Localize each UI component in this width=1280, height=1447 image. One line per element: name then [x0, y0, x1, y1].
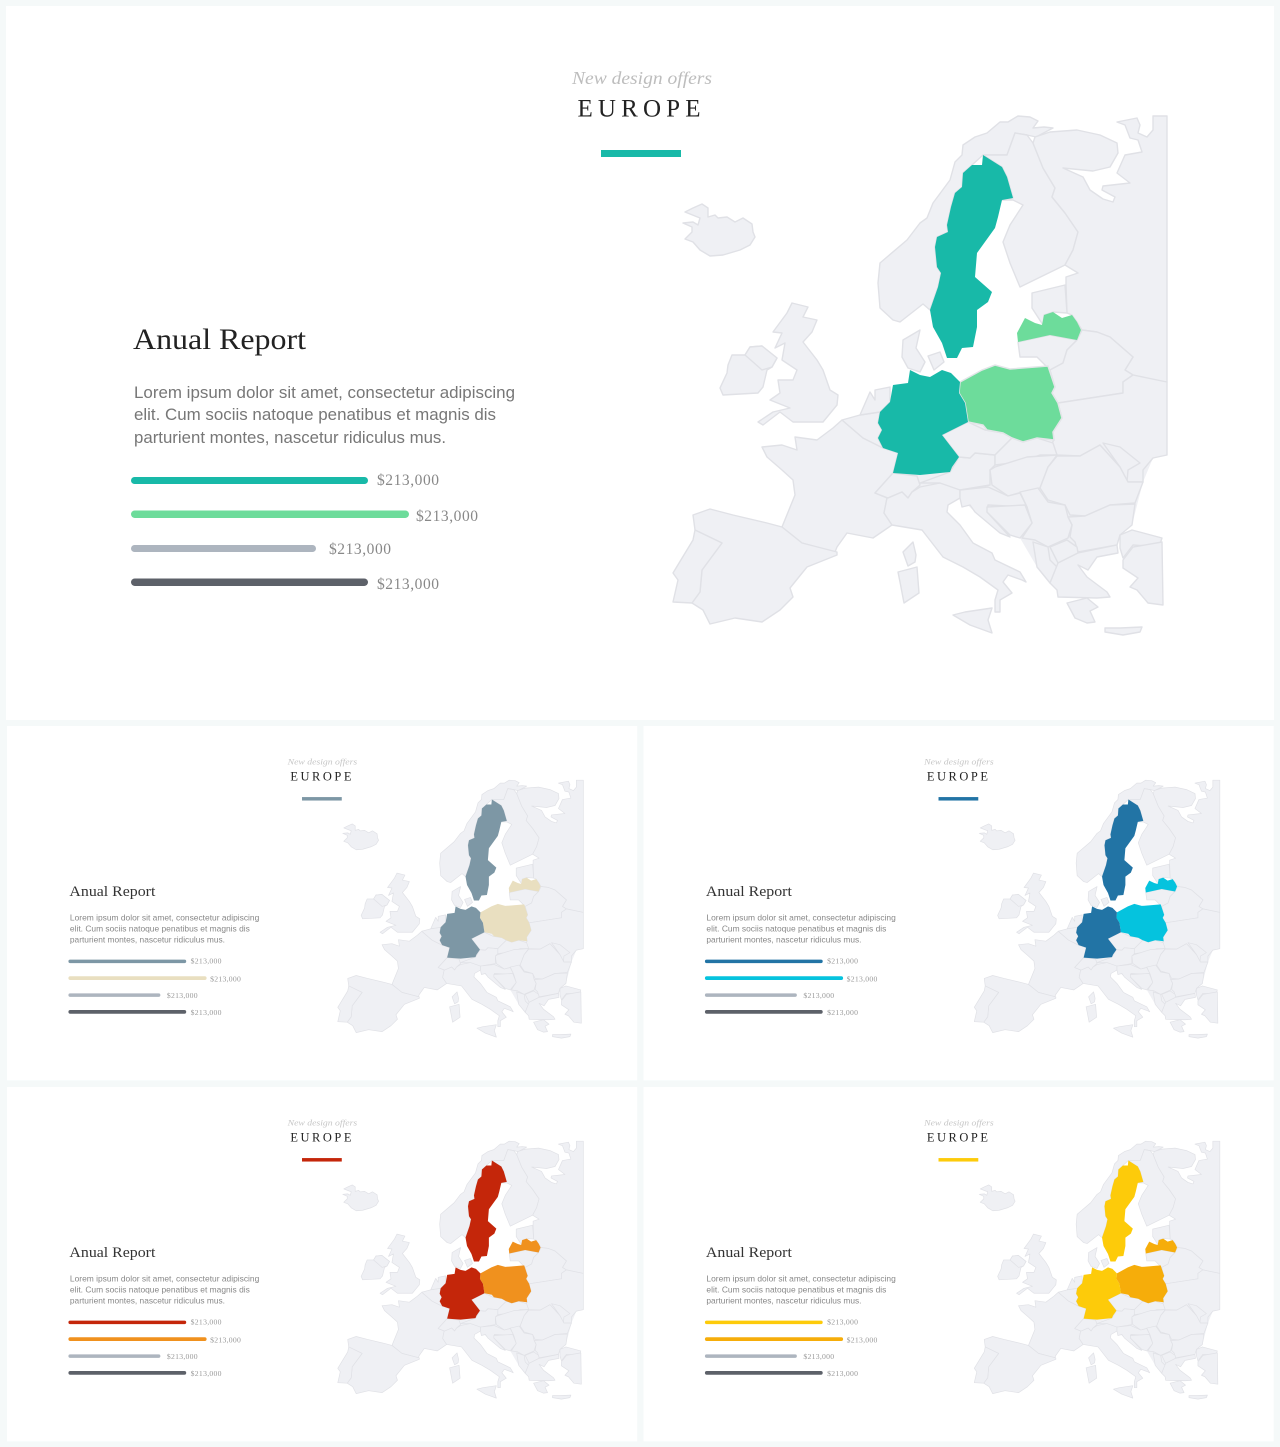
heading: Anual Report [69, 884, 156, 900]
bar chart: $213,000 [377, 472, 439, 489]
bar chart: $213,000 [827, 1369, 858, 1378]
bar chart: $213,000 [191, 1318, 222, 1327]
map of Europe [338, 780, 583, 1038]
subtitle: New design offers [286, 756, 358, 766]
bar chart [131, 472, 478, 593]
text block: elit. Cum sociis natoque penatibus et magnis dis [70, 1285, 250, 1294]
text block: Lorem ipsum dolor sit amet, consectetur adipiscing [706, 913, 896, 922]
accent bar [939, 797, 978, 801]
text block: parturient montes, nascetur ridiculus mus. [706, 936, 861, 945]
panel: slate and beige slide [7, 726, 637, 1080]
bar chart: $213,000 [191, 957, 222, 966]
panel: red and orange slide [7, 1087, 637, 1441]
bar chart [68, 1318, 241, 1378]
panel: blue and cyan slide [643, 726, 1274, 1080]
text block [70, 913, 260, 945]
bar chart: $213,000 [210, 1335, 241, 1344]
text block: elit. Cum sociis natoque penatibus et magnis dis [706, 924, 886, 933]
accent bar [302, 1158, 342, 1162]
bar chart: $213,000 [827, 1008, 858, 1017]
text block: elit. Cum sociis natoque penatibus et magnis dis [134, 406, 496, 424]
text block [706, 1274, 896, 1306]
map of Europe [338, 1141, 583, 1399]
bar chart: $213,000 [847, 1335, 878, 1344]
title: EUROPE [927, 769, 988, 783]
text block [70, 1274, 260, 1306]
title: EUROPE [927, 1130, 988, 1144]
bar chart [68, 957, 241, 1017]
text block: parturient montes, nascetur ridiculus mus. [706, 1297, 861, 1306]
bar chart: $213,000 [377, 576, 439, 593]
subtitle: New design offers [286, 1117, 358, 1127]
bar chart: $213,000 [827, 957, 858, 966]
bar chart: $213,000 [191, 1008, 222, 1017]
map of Europe [974, 1141, 1220, 1399]
panel: yellow and amber slide [643, 1087, 1274, 1441]
bar chart: $213,000 [847, 974, 878, 983]
text block [134, 384, 515, 447]
heading: Anual Report [69, 1245, 156, 1261]
bar chart [705, 957, 878, 1017]
bar chart: $213,000 [827, 1318, 858, 1327]
bar chart [705, 1318, 878, 1378]
text block: elit. Cum sociis natoque penatibus et magnis dis [70, 924, 250, 933]
text block: Lorem ipsum dolor sit amet, consectetur adipiscing [134, 384, 515, 402]
text block: parturient montes, nascetur ridiculus mus. [70, 1297, 225, 1306]
map of Europe [974, 780, 1220, 1038]
bar chart: $213,000 [210, 974, 241, 983]
bar chart: $213,000 [167, 991, 198, 1000]
accent bar [302, 797, 342, 801]
text block: elit. Cum sociis natoque penatibus et magnis dis [706, 1285, 886, 1294]
heading: Anual Report [133, 323, 307, 356]
panel: large teal Europe slide [6, 6, 1274, 720]
accent bar [601, 150, 681, 157]
bar chart: $213,000 [803, 1352, 834, 1361]
subtitle: New design offers [923, 756, 994, 766]
subtitle: New design offers [571, 68, 712, 88]
text block: Lorem ipsum dolor sit amet, consectetur adipiscing [706, 1274, 896, 1283]
bar chart: $213,000 [191, 1369, 222, 1378]
text block [706, 913, 896, 945]
text block: parturient montes, nascetur ridiculus mus. [134, 429, 446, 447]
title: EUROPE [290, 769, 351, 783]
heading: Anual Report [706, 1245, 793, 1261]
title: EUROPE [290, 1130, 351, 1144]
text block: Lorem ipsum dolor sit amet, consectetur adipiscing [70, 1274, 260, 1283]
text block: parturient montes, nascetur ridiculus mus. [70, 936, 225, 945]
bar chart: $213,000 [803, 991, 834, 1000]
bar chart: $213,000 [167, 1352, 198, 1361]
text block: Lorem ipsum dolor sit amet, consectetur adipiscing [70, 913, 260, 922]
subtitle: New design offers [923, 1117, 994, 1127]
title: EUROPE [578, 96, 700, 122]
bar chart: $213,000 [416, 508, 478, 525]
map of Europe [673, 116, 1167, 635]
heading: Anual Report [706, 884, 793, 900]
accent bar [939, 1158, 978, 1162]
bar chart: $213,000 [329, 541, 391, 558]
